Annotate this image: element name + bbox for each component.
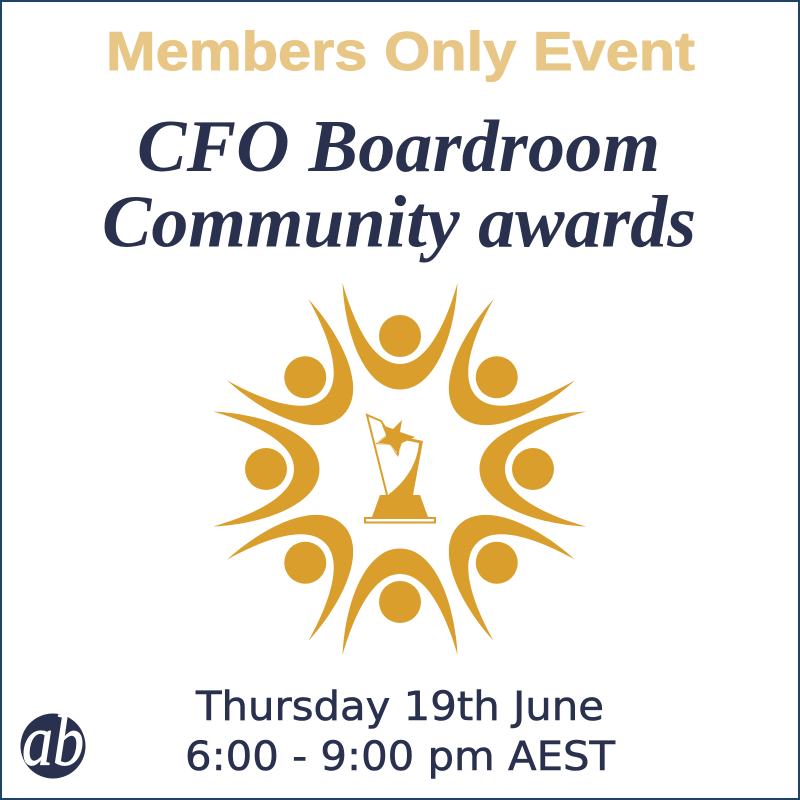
icon: ring of eight people [213,283,586,655]
date and time [185,684,616,780]
date and time: 6:00 - 9:00 pm AEST [185,734,616,780]
title: CFO Boardroom Community awards: CFO Boardroom [137,106,660,188]
date and time: Thursday 19th June [195,684,604,730]
title: CFO Boardroom Community awards: Community awards [102,182,696,264]
heading: Members Only Event: Members Only Event [106,20,695,82]
title: CFO Boardroom Community awards [102,106,696,264]
icon: star trophy [365,415,435,522]
logo: ab badge: ab [22,701,84,781]
